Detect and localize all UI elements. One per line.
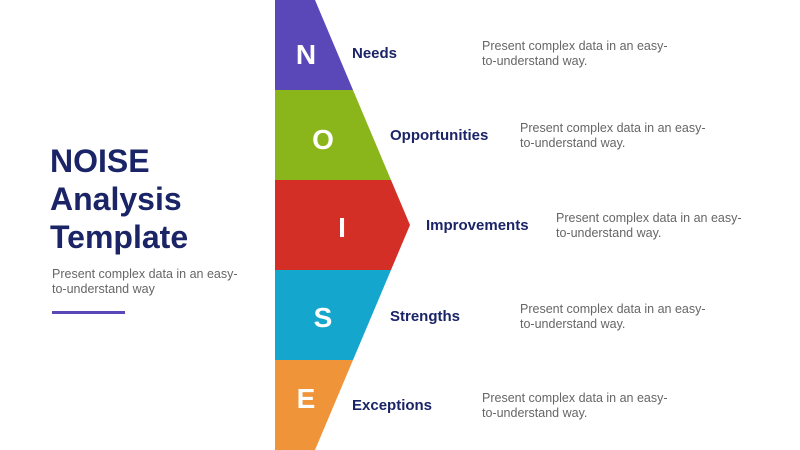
desc: Improvements: Present complex data in an easy-to-understand way. — [556, 211, 742, 240]
title — [50, 143, 188, 255]
segment E: E — [297, 383, 315, 414]
subtitle text: Present complex data in an easy-to-understand way — [52, 267, 238, 296]
segment O: O — [312, 124, 334, 155]
segment I: I — [338, 212, 346, 243]
segment O — [275, 90, 391, 180]
segment N — [275, 0, 353, 90]
divider line — [52, 311, 125, 314]
title: NOISE — [50, 143, 150, 179]
label: Improvements: Improvements — [426, 217, 529, 234]
label: Opportunities: Opportunities — [390, 127, 488, 144]
segment I — [275, 180, 410, 270]
label: Strengths: Strengths — [390, 308, 460, 325]
desc: Strengths: Present complex data in an easy-to-understand way. — [520, 302, 706, 331]
segment S — [275, 270, 391, 360]
segment E — [275, 360, 353, 450]
segment N: N — [296, 39, 316, 70]
segment S: S — [314, 302, 332, 333]
title: Analysis — [50, 181, 182, 217]
desc: Exceptions: Present complex data in an easy-to-understand way. — [482, 391, 668, 420]
title: Template — [50, 219, 188, 255]
label: Needs: Needs — [352, 45, 397, 62]
label: Exceptions: Exceptions — [352, 397, 432, 414]
desc: Opportunities: Present complex data in an easy-to-understand way. — [520, 121, 706, 150]
desc: Needs: Present complex data in an easy-to-understand way. — [482, 39, 668, 68]
